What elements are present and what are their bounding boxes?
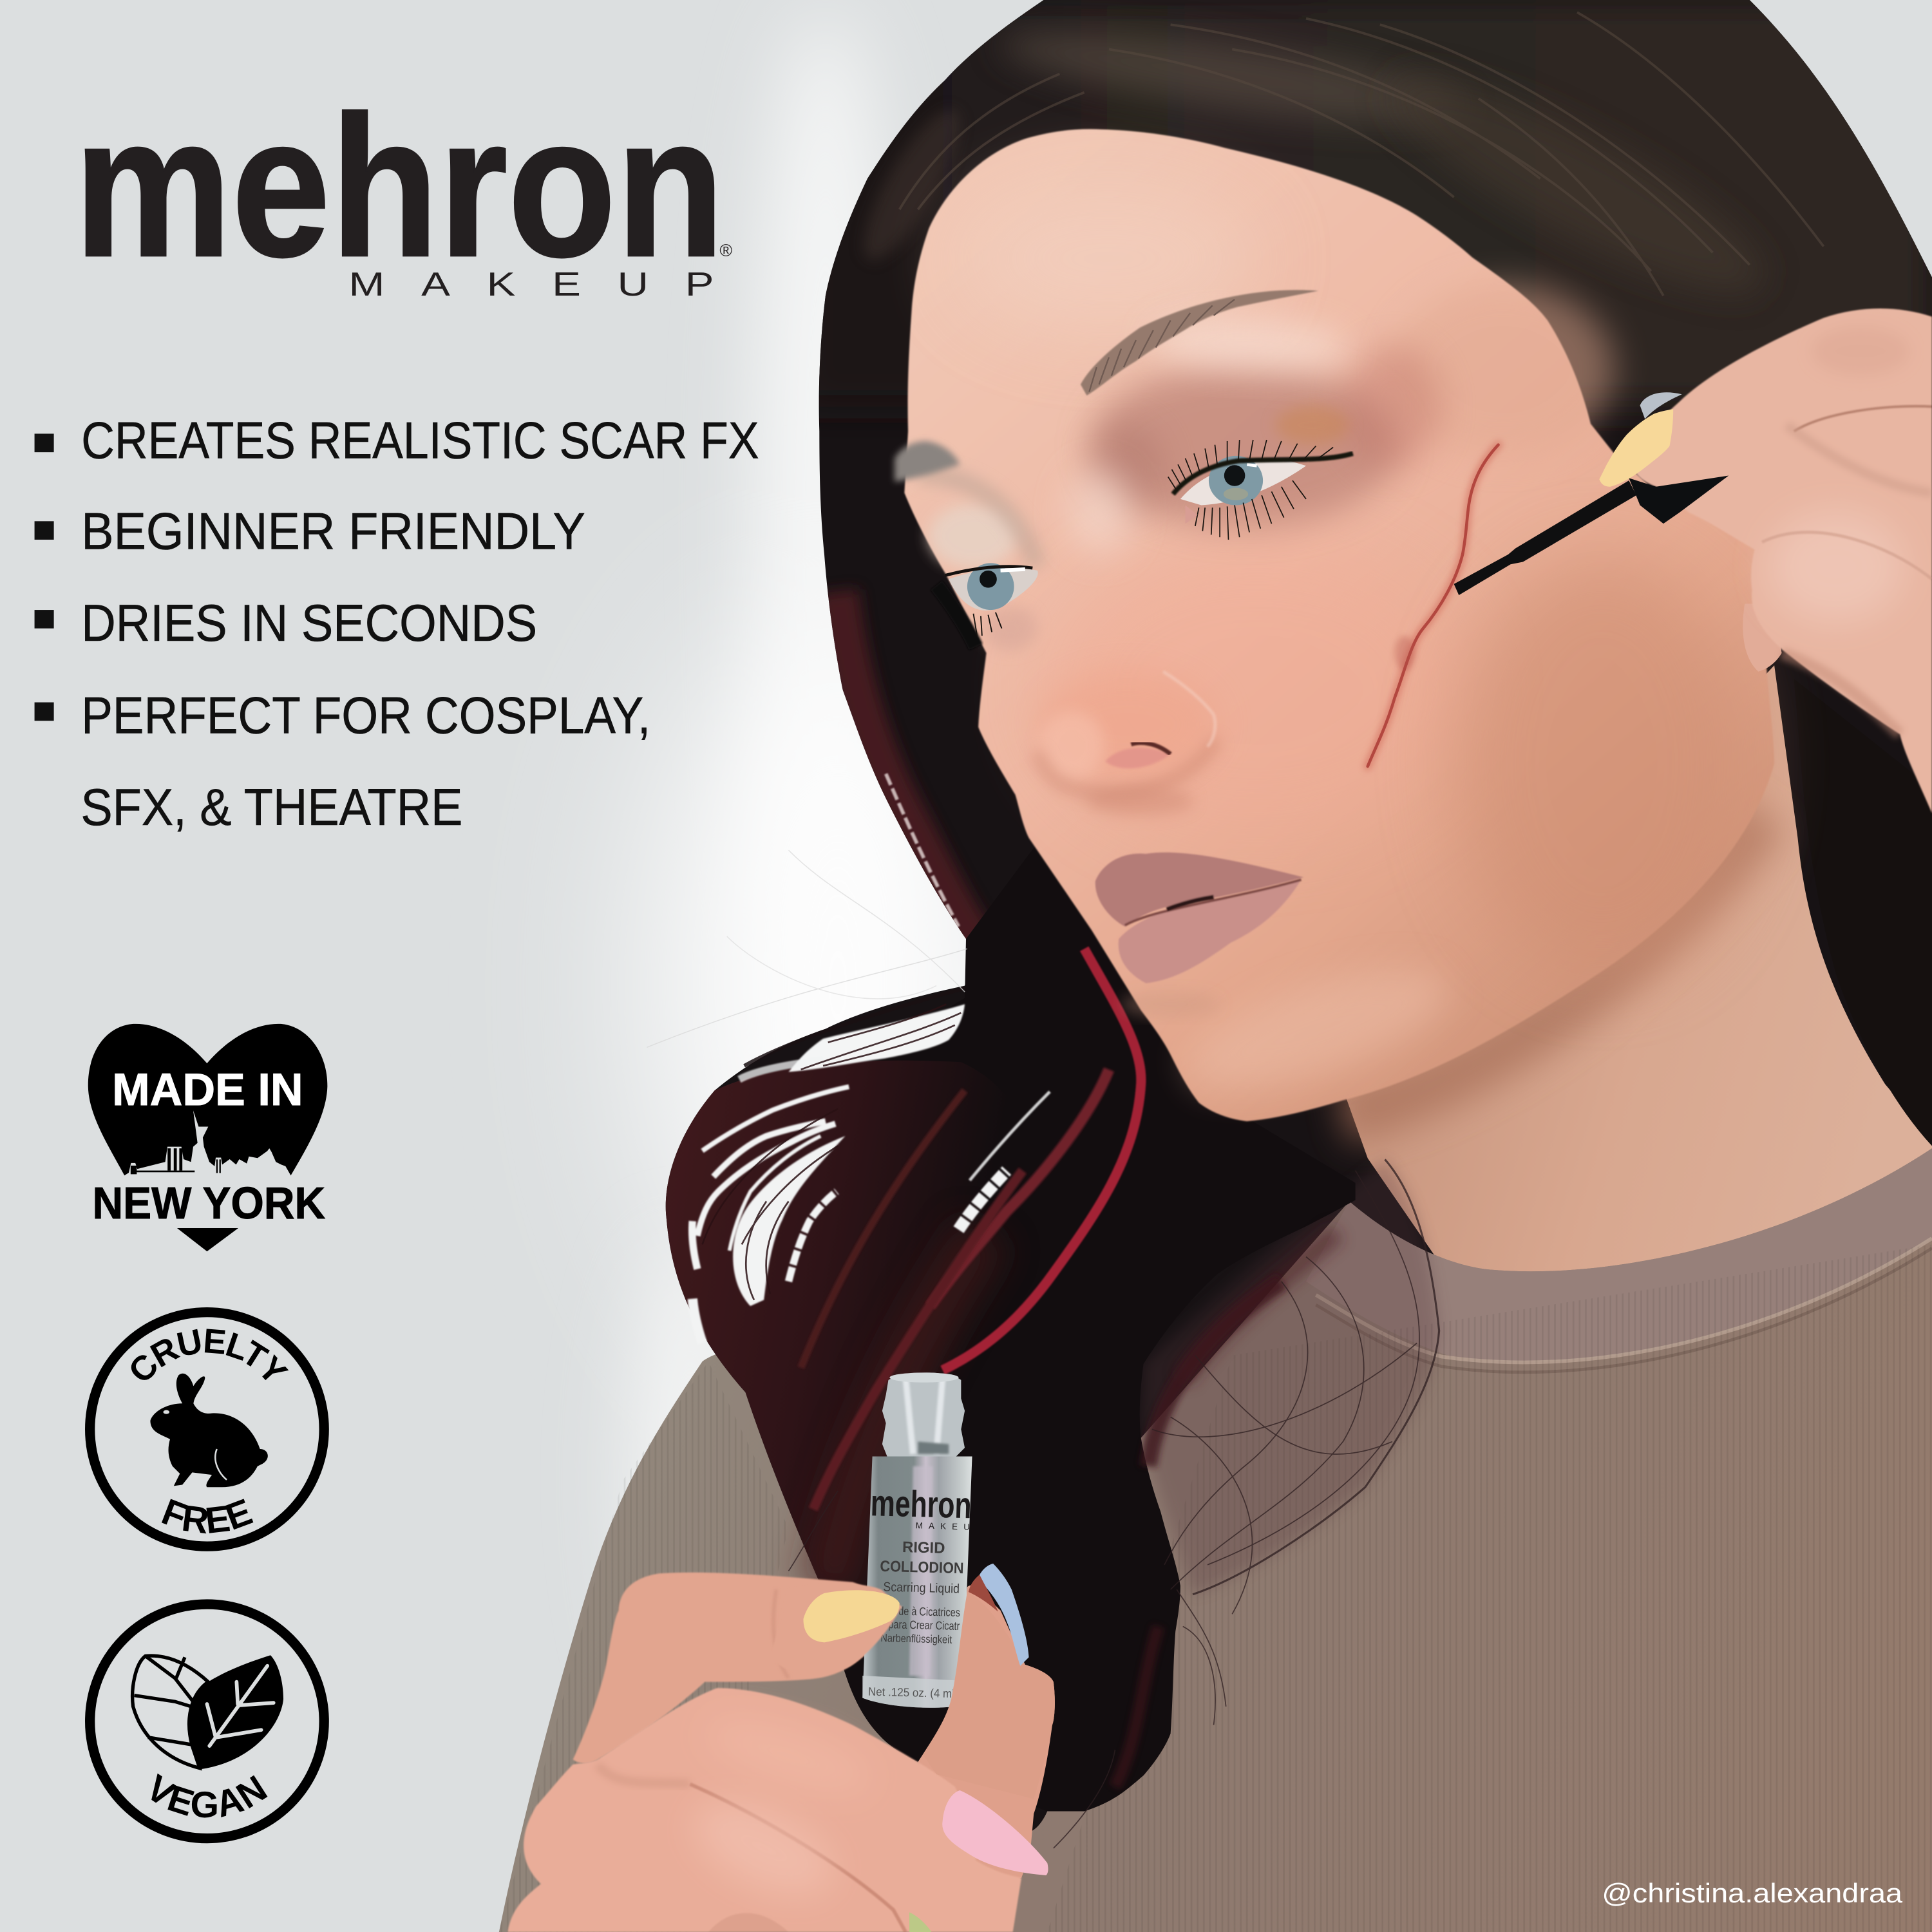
dark strands across highlights [703, 988, 965, 1300]
light streaks on hair edge [886, 774, 959, 927]
bottle label: spanish: para Crear Cicatr [888, 1618, 960, 1633]
finger with blue nail [923, 1564, 1055, 1799]
cruelty label: CRUELTY [131, 1329, 289, 1381]
badge: cruelty free [85, 1307, 329, 1551]
lips [1095, 853, 1303, 1016]
vegan label: VEGAN [151, 1774, 268, 1817]
free label: FREE [162, 1499, 254, 1534]
icon: leaf veins [207, 1666, 274, 1746]
badge: vegan [85, 1599, 329, 1843]
applicator brush [1454, 476, 1728, 595]
green finger nail [909, 1912, 931, 1932]
skyline details [131, 1148, 221, 1174]
badge: made in new york [88, 1024, 327, 1251]
icon: yellow finger nail [1599, 409, 1673, 487]
finger over bottle with yellow nail [770, 1584, 902, 1674]
hair top shine [801, 0, 1932, 949]
bottle label: net weight: Net .125 oz. (4 ml) [868, 1685, 958, 1700]
bottle label: scarring liquid: Scarring Liquid [883, 1580, 960, 1596]
bullet icon 3 [35, 610, 54, 629]
icon: rabbit [150, 1374, 268, 1487]
ring [90, 1604, 324, 1839]
bullet icon 1 [35, 433, 54, 452]
lower hand: back finger [918, 1586, 1055, 1885]
face [904, 129, 1774, 1121]
icon: outlined leaf [133, 1656, 208, 1768]
mehron logo [74, 75, 732, 303]
bullet icon 4 [35, 703, 54, 721]
registered mark: ® [719, 241, 732, 260]
logo subtitle: MAKEUP [348, 266, 714, 303]
photo credit: @christina.alexandraa [1602, 1878, 1903, 1908]
hair highlight gaps [692, 1004, 1050, 1343]
benefit 4: PERFECT FOR COSPLAY, [81, 687, 650, 744]
bottle label: product name: RIGID [902, 1539, 945, 1557]
translucent hair loop over sweater [1141, 1159, 1439, 1595]
face shading [918, 185, 1750, 1113]
sweater back layer [499, 1152, 1932, 1932]
scar [1368, 445, 1499, 766]
nose [1037, 670, 1217, 816]
ear [1743, 604, 1782, 672]
right eye [1168, 440, 1353, 540]
hair front locks with red streaks [666, 838, 1356, 1811]
pointer [177, 1228, 238, 1251]
hand: upper right fingers [1633, 308, 1932, 813]
bottle label: makeup: MAKEU [916, 1520, 970, 1531]
heart [88, 1024, 327, 1175]
skyline cutout [121, 1110, 296, 1180]
benefit 2: BEGINNER FRIENDLY [81, 502, 585, 560]
sweater collar [1059, 1148, 1932, 1932]
bottle label: brand: mehron [870, 1482, 972, 1526]
icon: gray thumb nail [1640, 392, 1682, 419]
benefit 4 continued: SFX, & THEATRE [80, 779, 462, 837]
pink finger nail [942, 1790, 1048, 1875]
neck [1337, 665, 1932, 1306]
logo wordmark: mehron [74, 75, 724, 299]
left eye [936, 563, 1038, 647]
ring [90, 1312, 324, 1546]
benefits list [35, 412, 759, 837]
lower hand: palm and front fingers [507, 1589, 1032, 1932]
outer reddish hair edge [838, 591, 980, 949]
loose hair wisps [647, 850, 1439, 1848]
product bottle [862, 1372, 972, 1708]
icon: solid leaf [188, 1655, 283, 1769]
bottle label: collodion: COLLODION [880, 1558, 964, 1577]
right side hair [1794, 679, 1932, 1146]
left eyebrow [895, 441, 960, 482]
bottle label: french: de à Cicatrices [898, 1605, 960, 1619]
benefit 1: CREATES REALISTIC SCAR FX [81, 412, 759, 470]
right eyebrow [1081, 290, 1318, 395]
new york label: NEW YORK [92, 1178, 325, 1228]
lower hand: thumb [573, 1573, 900, 1763]
bottle label: german: Narbenflüssigkeit [880, 1631, 952, 1646]
made in label: MADE IN [112, 1065, 303, 1115]
hair back mass [666, 0, 1932, 1834]
benefit 3: DRIES IN SECONDS [81, 594, 537, 652]
sweater ribbing texture [499, 1244, 1932, 1932]
neck shadow under jaw [1343, 813, 1762, 1115]
bullet icon 2 [35, 521, 54, 540]
